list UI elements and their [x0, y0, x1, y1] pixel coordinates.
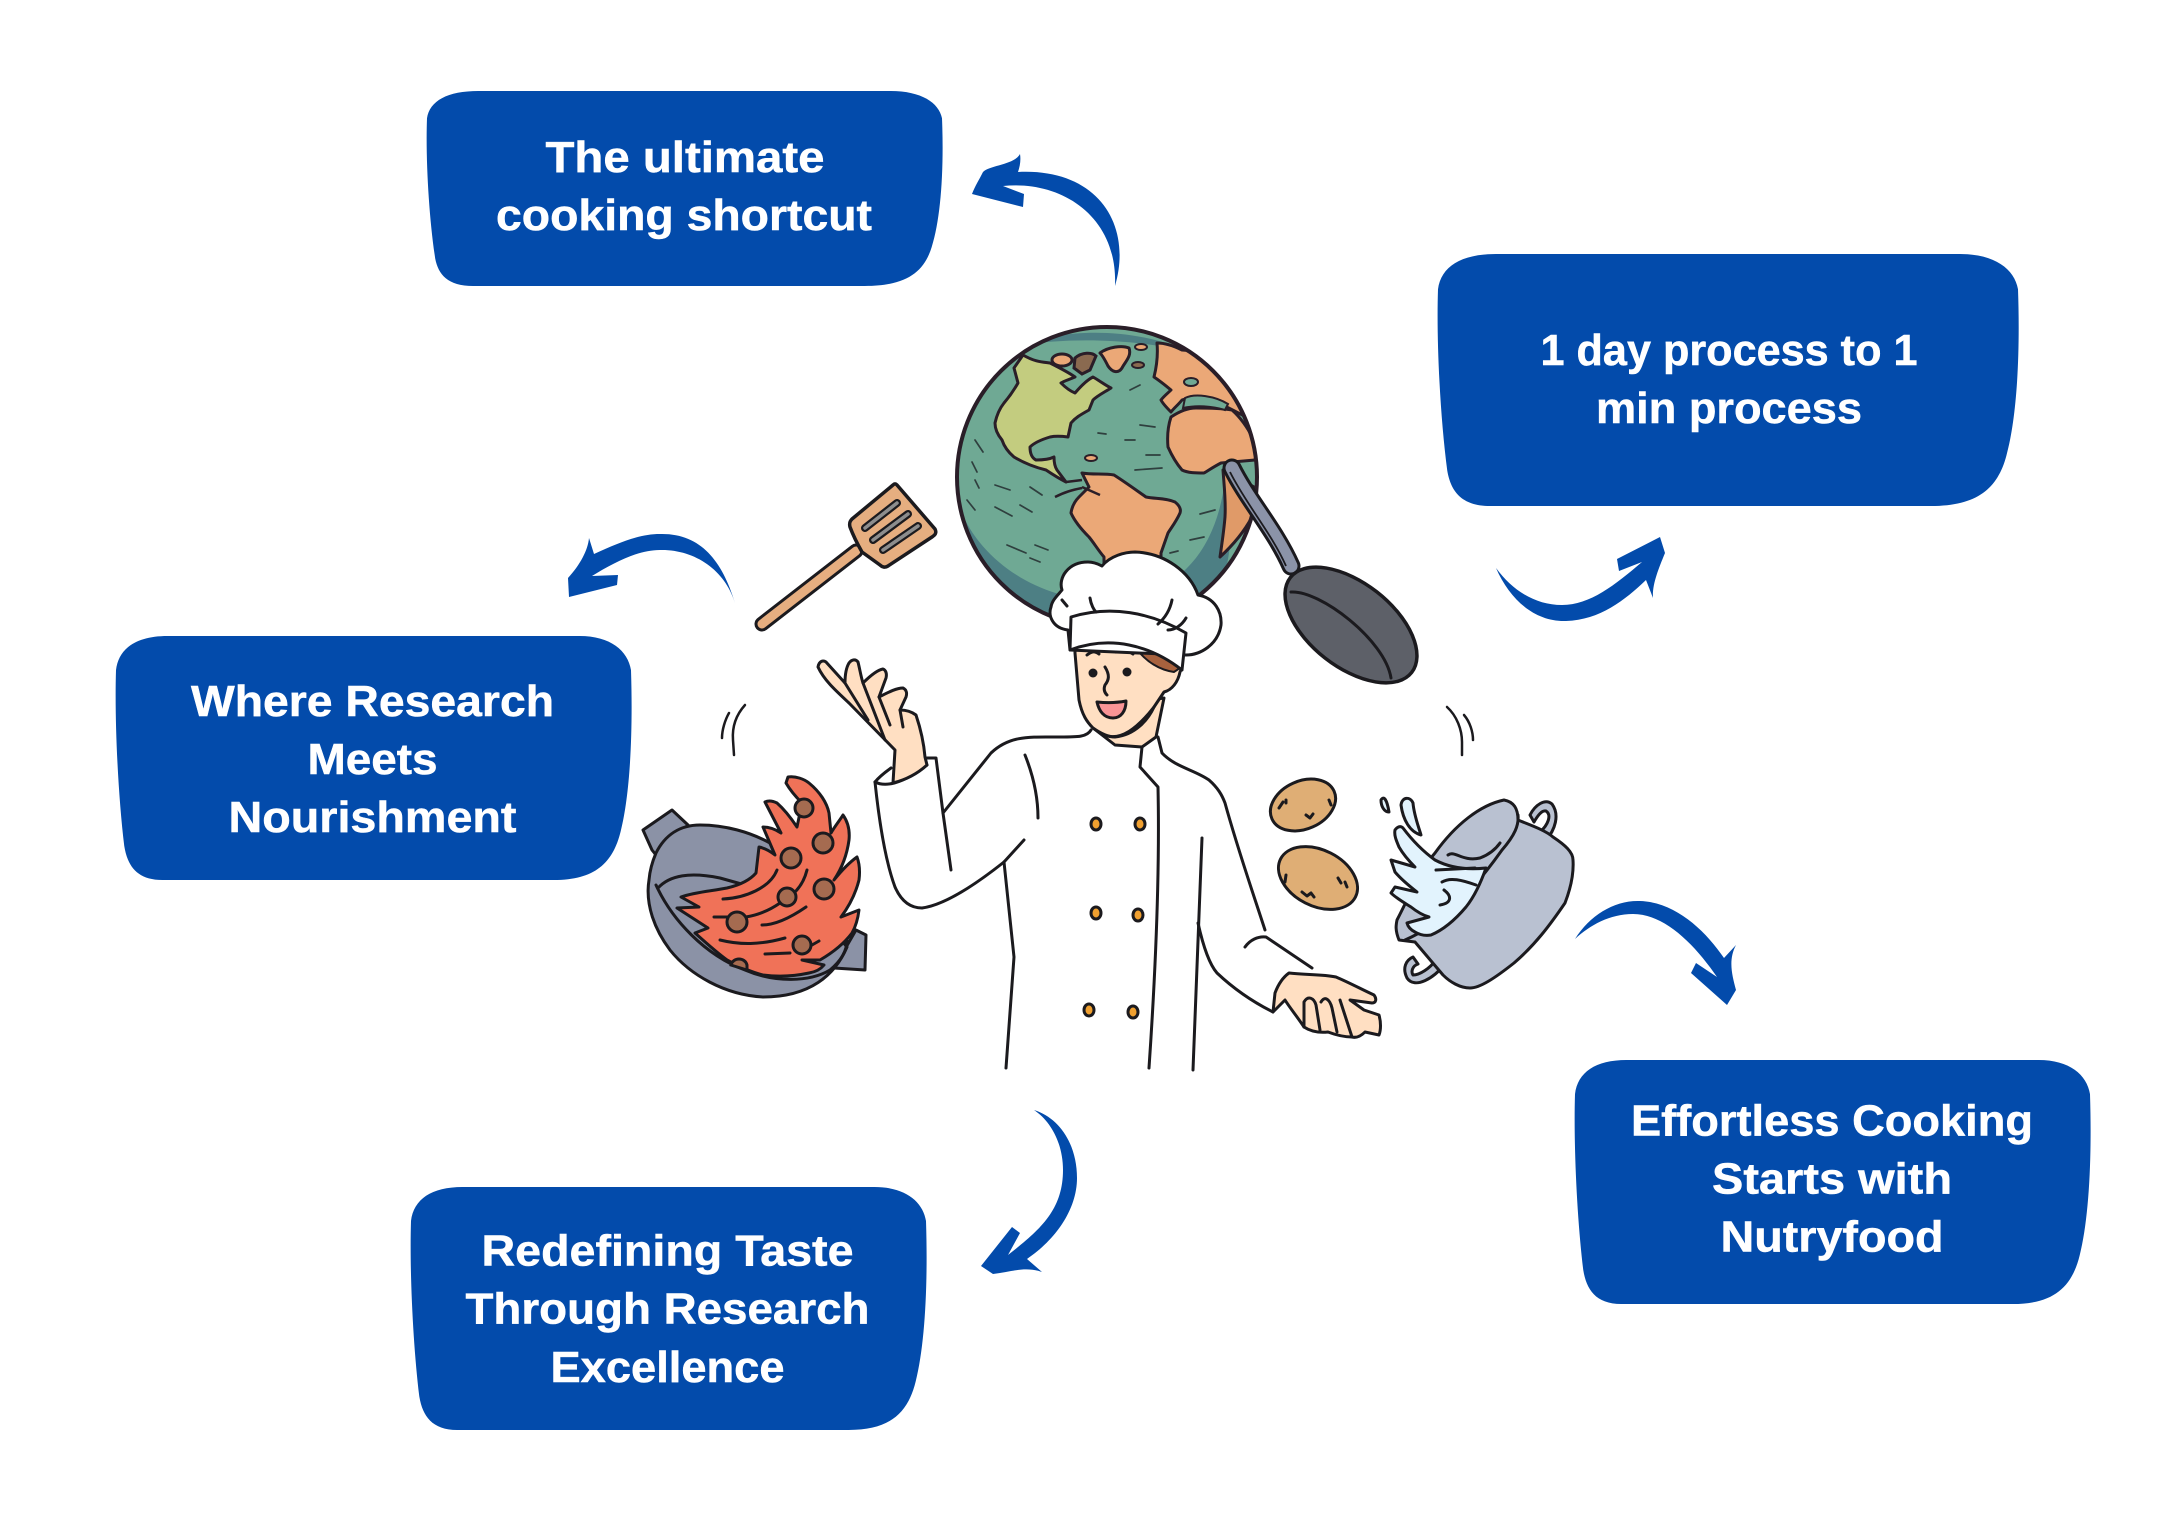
pot body: [1396, 800, 1573, 988]
label text: Meets: [308, 735, 438, 784]
chef left arm and sleeve: [875, 730, 1091, 908]
label text: [1540, 326, 1918, 433]
icon: potato upper: [1262, 769, 1344, 841]
wok inner rim: [656, 875, 847, 979]
water splash: [1391, 827, 1486, 935]
wok body: [648, 825, 847, 997]
icon: pot with water: [1381, 798, 1573, 988]
panel: Where Research Meets Nourishment: [116, 636, 632, 880]
arrow: to where research: [568, 534, 735, 603]
icon: globe: [957, 327, 1257, 640]
pot rim line: [1405, 815, 1518, 940]
chef jaw shadow: [1100, 707, 1154, 737]
chef hair: [1136, 648, 1180, 672]
label text: min process: [1596, 384, 1862, 433]
label text: Starts with: [1712, 1154, 1952, 1204]
label text: Through Research: [466, 1284, 870, 1334]
raised hand finger lines: [845, 683, 903, 740]
chef mouth: [1097, 701, 1126, 718]
label text: [496, 133, 872, 240]
panel: The ultimate cooking shortcut: [427, 91, 943, 286]
coat buttons: [1084, 818, 1145, 1018]
food lines: [714, 870, 819, 954]
chef raised hand: [818, 660, 927, 783]
chef neck: [1093, 698, 1164, 747]
panel: Redefining Taste Through Research Excellence: [411, 1187, 927, 1430]
label text: Excellence: [550, 1343, 784, 1392]
label text: [191, 677, 554, 842]
illustration: chef: [818, 552, 1380, 1070]
wok handles: [643, 810, 866, 970]
chef eyes and nose: [1087, 650, 1133, 695]
water drops: [1381, 798, 1421, 835]
stir fry food: [677, 777, 860, 976]
food meatballs: [727, 799, 834, 970]
label text: Where Research: [191, 677, 554, 726]
motion lines: wok: [722, 705, 745, 755]
chef hat: [1050, 552, 1221, 670]
chef coat front: [1004, 737, 1312, 1070]
arrow: to redefining taste: [981, 1110, 1077, 1274]
arrow: to effortless cooking: [1575, 901, 1736, 1005]
icon: frying pan: [1230, 468, 1438, 706]
pot handles: [1405, 802, 1556, 983]
icon: spatula: [762, 484, 936, 624]
label text: 1 day process to 1: [1540, 326, 1918, 375]
label text: cooking shortcut: [496, 191, 872, 240]
chef face: [1075, 640, 1182, 737]
motion lines: pot: [1447, 707, 1473, 755]
arrow: to 1 day process: [1496, 537, 1665, 621]
label text: [466, 1226, 870, 1392]
arrow: to ultimate shortcut: [972, 154, 1120, 286]
label text: Effortless Cooking: [1631, 1096, 2033, 1146]
panel: Effortless Cooking Starts with Nutryfood: [1575, 1060, 2091, 1304]
panel: 1 day process to 1 min process: [1438, 254, 2019, 506]
label text: Nutryfood: [1720, 1212, 1944, 1262]
label text: Nourishment: [228, 793, 517, 842]
chef lower hand: [1273, 973, 1380, 1037]
icon: wok with food: [643, 777, 866, 997]
icon: potato lower: [1268, 834, 1368, 922]
label text: [1631, 1096, 2033, 1262]
label text: Redefining Taste: [482, 1226, 854, 1276]
label text: The ultimate: [546, 133, 824, 182]
